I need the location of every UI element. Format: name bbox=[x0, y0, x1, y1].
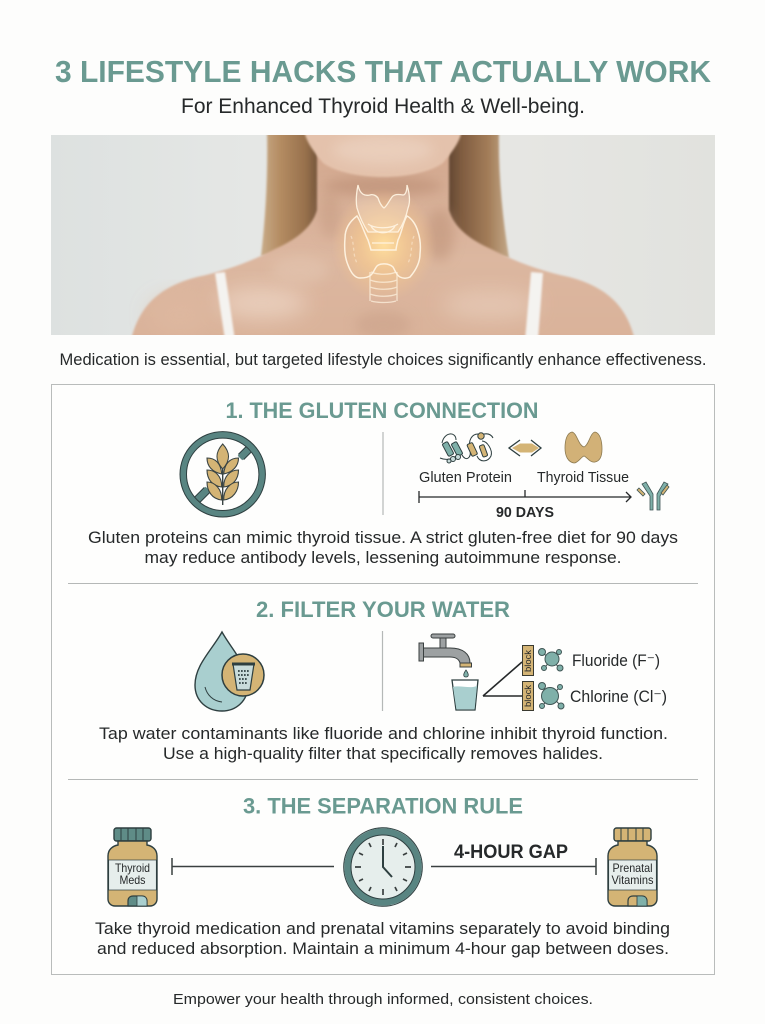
section 2 heading: 2. FILTER YOUR WATER bbox=[256, 597, 510, 622]
body text 3: and reduced absorption. Maintain a minimum 4-hour gap between doses. bbox=[97, 939, 669, 958]
icon: clock bbox=[344, 828, 422, 906]
body text 1: may reduce antibody levels, lessening autoimmune response. bbox=[144, 548, 622, 567]
separator line right bbox=[431, 858, 596, 875]
icon: chlorine molecule bbox=[538, 682, 564, 709]
label: gluten protein: Gluten Protein bbox=[419, 469, 512, 486]
icon: thyroid meds bottle: Thyroid bbox=[115, 861, 150, 875]
icon: water drop with filter bbox=[195, 632, 264, 711]
body text 3 bbox=[95, 919, 670, 958]
separator line left bbox=[172, 858, 334, 875]
body text 1: Gluten proteins can mimic thyroid tissue. A strict gluten-free diet for 90 days bbox=[88, 528, 678, 547]
label: 4-hour gap: 4-HOUR GAP bbox=[454, 842, 568, 863]
icon: prenatal vitamins bottle: Vitamins bbox=[612, 873, 654, 887]
icon: thyroid tissue bbox=[565, 432, 602, 463]
timeline arrow bbox=[419, 490, 631, 503]
subtitle: For Enhanced Thyroid Health & Well-being. bbox=[181, 95, 585, 118]
section 1 heading: 1. THE GLUTEN CONNECTION bbox=[226, 398, 538, 423]
label: thyroid tissue: Thyroid Tissue bbox=[537, 469, 629, 486]
icon: antibody bbox=[637, 482, 669, 510]
icon: no wheat bbox=[180, 432, 265, 517]
body text 2: Use a high-quality filter that specifically removes halides. bbox=[163, 744, 603, 763]
body text 3: Take thyroid medication and prenatal vitamins separately to avoid binding bbox=[95, 919, 670, 938]
body text 1 bbox=[88, 528, 678, 567]
body text 2: Tap water contaminants like fluoride and chlorine inhibit thyroid function. bbox=[99, 724, 668, 743]
hero photo: neck with glowing thyroid bbox=[51, 130, 715, 345]
main panel bbox=[52, 384, 714, 974]
section 3 heading: 3. THE SEPARATION RULE bbox=[243, 794, 523, 818]
icon: thyroid meds bottle: Meds bbox=[120, 873, 146, 887]
icon: gluten protein bbox=[440, 433, 493, 463]
connector lines bbox=[483, 662, 522, 696]
title: 3 LIFESTYLE HACKS THAT ACTUALLY WORK bbox=[55, 54, 712, 89]
icon: faucet and glass bbox=[419, 634, 478, 710]
body text 2 bbox=[99, 724, 668, 763]
icon: block labels: block bbox=[523, 649, 533, 672]
label: fluoride: Fluoride (F⁻) bbox=[572, 652, 660, 670]
icon: fluoride molecule bbox=[538, 648, 563, 671]
arrow: double-headed bbox=[509, 440, 541, 456]
footer: Empower your health through informed, consistent choices. bbox=[173, 991, 593, 1008]
divider bbox=[382, 432, 384, 515]
icon: block labels bbox=[522, 646, 534, 710]
divider bbox=[382, 631, 384, 711]
caption: Medication is essential, but targeted lifestyle choices significantly enhance effectiveness. bbox=[60, 351, 706, 369]
icon: prenatal vitamins bottle: Prenatal bbox=[612, 861, 652, 875]
icon: thyroid meds bottle bbox=[108, 828, 157, 906]
label: chlorine: Chlorine (Cl⁻) bbox=[570, 688, 667, 706]
icon: prenatal vitamins bottle bbox=[608, 828, 657, 906]
icon: block labels: block bbox=[523, 684, 533, 707]
label: 90 days: 90 DAYS bbox=[496, 505, 554, 521]
